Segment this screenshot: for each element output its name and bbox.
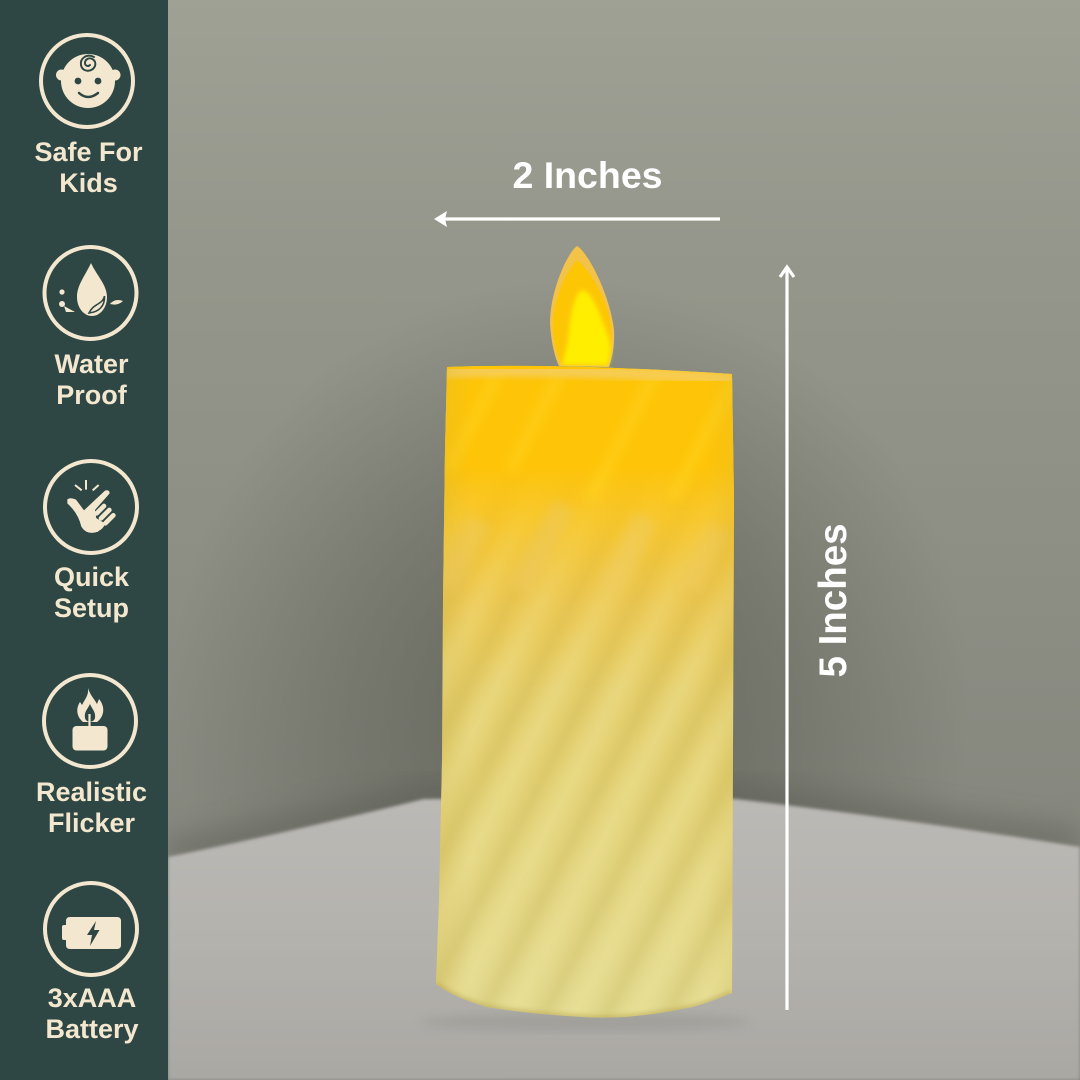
icon: baby face xyxy=(41,35,133,127)
spiral ribs: shadows xyxy=(458,931,711,1014)
feature: safe for kids xyxy=(34,35,143,198)
dimension label: 5 Inches: 5 Inches xyxy=(812,523,855,678)
bottom edge shadow xyxy=(436,984,732,1018)
feature: quick setup xyxy=(45,461,137,623)
feature: water proof xyxy=(44,247,136,410)
label: Safe For Kids: Kids xyxy=(59,168,118,198)
top edge highlight xyxy=(447,371,732,379)
label: Realistic Flicker: Realistic xyxy=(36,777,147,807)
icon: candle flame xyxy=(44,675,136,767)
feature: realistic flicker xyxy=(36,675,147,838)
panel: feature sidebar xyxy=(0,0,168,1080)
icon: battery xyxy=(45,883,137,975)
label: Water Proof: Proof xyxy=(56,380,128,410)
flame xyxy=(550,246,614,367)
dimension: height arrow xyxy=(780,267,794,1010)
dimension label: 2 Inches: 2 Inches xyxy=(512,154,663,196)
label: 3xAAA Battery: Battery xyxy=(45,1014,139,1044)
label: Water Proof: Water xyxy=(54,349,129,379)
label: 3xAAA Battery: 3xAAA xyxy=(48,983,136,1013)
flame glow on wax xyxy=(443,366,734,654)
candle body xyxy=(436,366,734,1018)
icon: snapping hand xyxy=(45,461,137,553)
label: Realistic Flicker: Flicker xyxy=(48,808,136,838)
label: Quick Setup: Setup xyxy=(54,593,129,623)
candle xyxy=(436,246,734,1018)
label: Safe For Kids: Safe For xyxy=(34,137,143,167)
spiral ribs: highlights xyxy=(438,533,734,998)
feature: 3xAAA battery xyxy=(45,883,139,1044)
icon: water drop xyxy=(44,247,136,339)
dimension: width arrow xyxy=(434,211,720,227)
label: Quick Setup: Quick xyxy=(54,562,130,592)
